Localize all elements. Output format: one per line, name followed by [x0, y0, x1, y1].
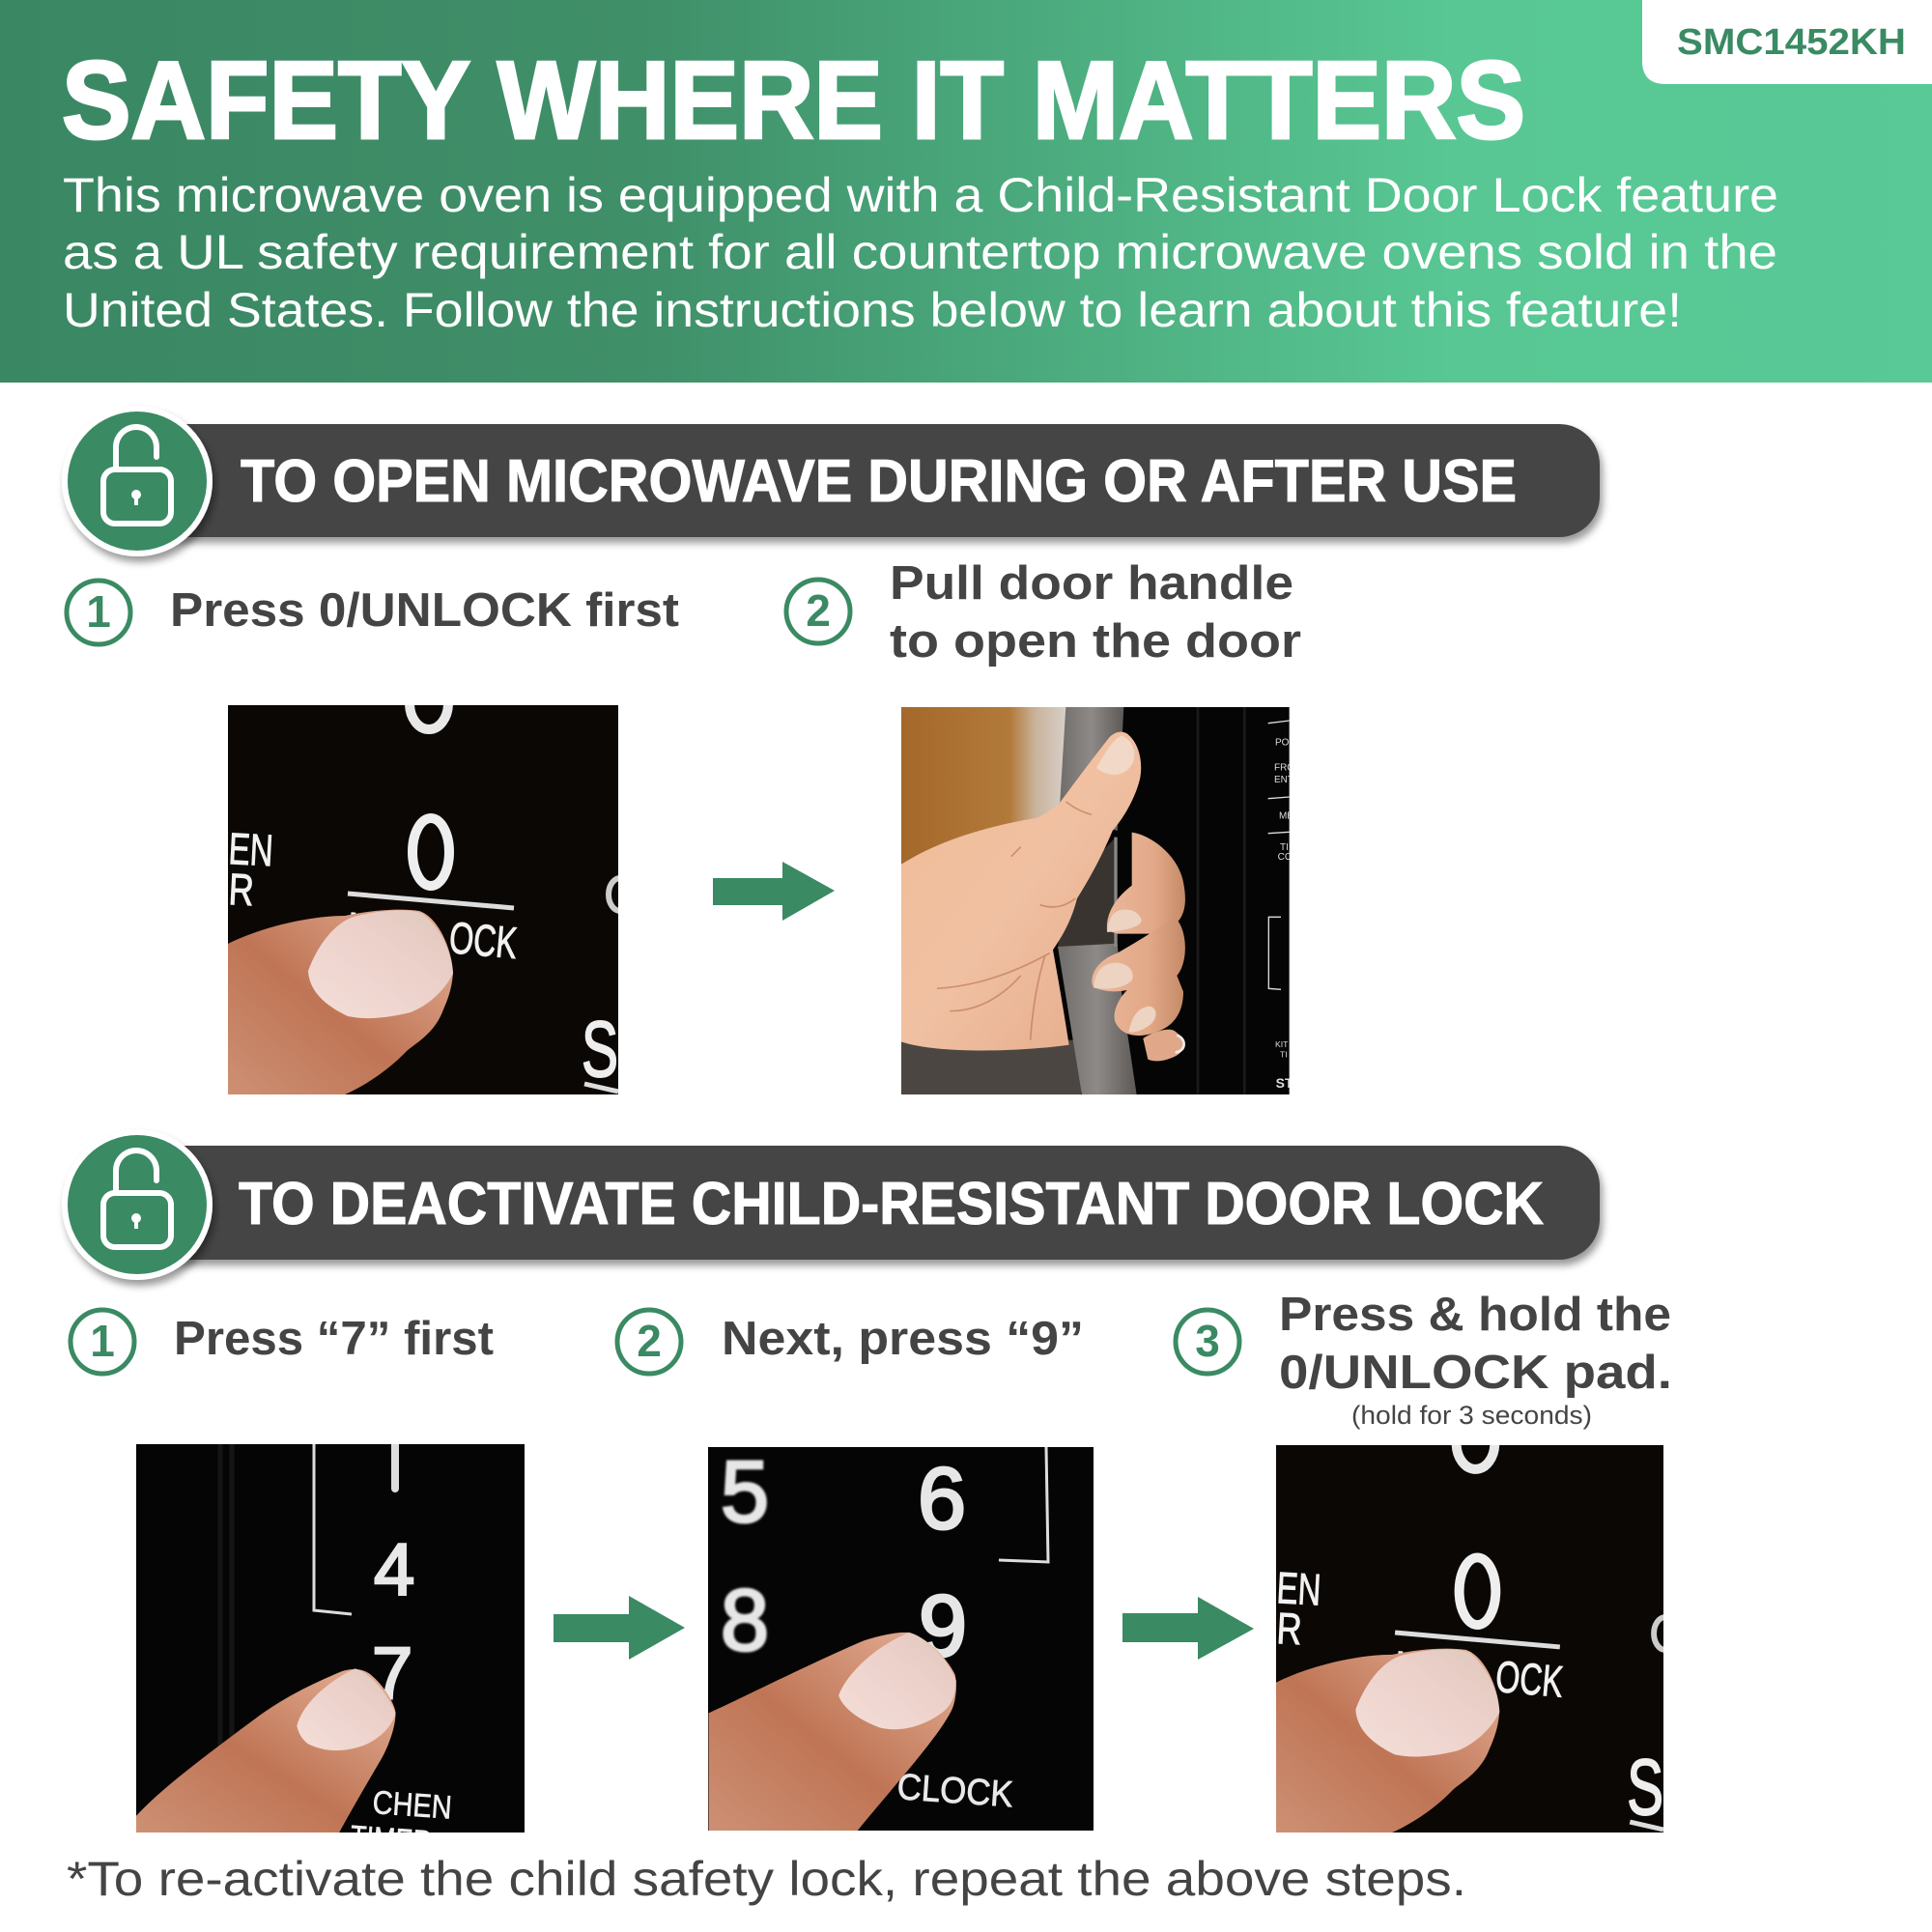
- arrow: [1122, 1597, 1254, 1660]
- step 2: press 9: 2: [637, 1316, 662, 1366]
- photo: hand pulling door handle: CO: [1278, 852, 1293, 863]
- photo: finger on 7: 7: [372, 1633, 412, 1715]
- step 1: press 7: Press “7” first: [174, 1313, 494, 1365]
- photo: finger on zero button: OCK: [447, 912, 520, 968]
- heading: TO OPEN MICROWAVE DURING OR AFTER USE: [241, 448, 1517, 515]
- intro paragraph: This microwave oven is equipped with a Child-Resistant Door Lock feature: [63, 168, 1778, 222]
- section bar: to open microwave: [62, 406, 1600, 556]
- photo: finger holding zero button: EN: [1275, 1563, 1322, 1615]
- photo: finger holding zero button: [1275, 1417, 1677, 1833]
- step 2: pull handle: Pull door handle: [890, 557, 1293, 610]
- model tag: SMC1452KH: [1677, 22, 1906, 63]
- step 2: press 9: Next, press “9”: [722, 1313, 1084, 1365]
- title: SAFETY WHERE IT MATTERS: [62, 40, 1525, 162]
- arrow: [713, 862, 835, 921]
- model tag: [1642, 0, 1932, 84]
- photo: finger on 7: [136, 1444, 525, 1861]
- photo: hand pulling door handle: FRO: [1274, 762, 1294, 773]
- photo: finger on 9: CLOCK: [895, 1767, 1014, 1815]
- footnote: *To re-activate the child safety lock, repeat the above steps.: [67, 1852, 1466, 1906]
- photo: finger on 9: [708, 1444, 1094, 1831]
- photo: finger on 7: TIMER: [349, 1819, 433, 1861]
- step 2: pull handle: [786, 557, 1301, 668]
- photo: hand pulling door handle: [901, 707, 1295, 1094]
- photo: finger on 9: 5: [721, 1444, 769, 1541]
- step 1: press unlock: 1: [86, 586, 111, 637]
- intro paragraph: [63, 168, 1778, 337]
- step 3: press and hold: 0/UNLOCK pad.: [1279, 1347, 1672, 1399]
- photo: finger on zero button: [227, 677, 632, 1094]
- intro paragraph: as a UL safety requirement for all countertop microwave ovens sold in the: [63, 225, 1777, 279]
- photo: finger on 9: 9: [919, 1578, 967, 1675]
- photo: finger holding zero button: OCK: [1493, 1652, 1565, 1707]
- step 3: press and hold: Press & hold the: [1279, 1289, 1671, 1341]
- step 3: press and hold: (hold for 3 seconds): [1351, 1401, 1592, 1430]
- icon: unlocked padlock: [62, 1129, 213, 1280]
- step 1: press 7: [71, 1310, 494, 1374]
- photo: finger on zero button: EN: [227, 823, 274, 875]
- step 2: pull handle: 2: [806, 585, 831, 636]
- photo: finger on zero button: R: [227, 864, 255, 915]
- step 1: press unlock: Press 0/UNLOCK first: [170, 584, 679, 637]
- photo: hand pulling door handle: TI: [1280, 1049, 1288, 1059]
- photo: hand pulling door handle: POT: [1275, 738, 1295, 749]
- step 1: press unlock: [67, 581, 679, 644]
- step 3: press and hold: [1176, 1289, 1672, 1430]
- photo: finger on 7: CHEN: [371, 1784, 453, 1827]
- photo: finger on zero button: UN: [345, 902, 407, 957]
- photo: finger on 9: 8: [721, 1573, 769, 1669]
- photo: finger holding zero button: R: [1275, 1604, 1303, 1654]
- photo: hand pulling door handle: TI: [1280, 842, 1289, 853]
- photo: finger holding zero button: S: [1627, 1744, 1663, 1832]
- section bar: deactivate lock: [62, 1129, 1600, 1280]
- step 1: press 7: 1: [90, 1316, 115, 1366]
- photo: finger holding zero button: UN: [1392, 1642, 1454, 1696]
- photo: finger on zero button: S: [582, 1006, 618, 1094]
- icon: unlocked padlock: [62, 406, 213, 556]
- step 2: pull handle: to open the door: [890, 615, 1301, 668]
- header banner: [0, 0, 1932, 383]
- photo: hand pulling door handle: ENT: [1274, 775, 1293, 785]
- photo: hand pulling door handle: ME: [1279, 811, 1293, 822]
- intro paragraph: United States. Follow the instructions below to learn about this feature!: [63, 283, 1682, 337]
- photo: hand pulling door handle: ST: [1276, 1075, 1293, 1091]
- photo: finger on 7: 4: [374, 1529, 414, 1611]
- heading: TO DEACTIVATE CHILD-RESISTANT DOOR LOCK: [239, 1171, 1544, 1237]
- step 2: press 9: [617, 1310, 1084, 1374]
- photo: finger on 9: 6: [918, 1451, 966, 1548]
- photo: hand pulling door handle: KIT: [1275, 1039, 1289, 1049]
- step 3: press and hold: 3: [1195, 1316, 1220, 1366]
- arrow: [554, 1596, 685, 1660]
